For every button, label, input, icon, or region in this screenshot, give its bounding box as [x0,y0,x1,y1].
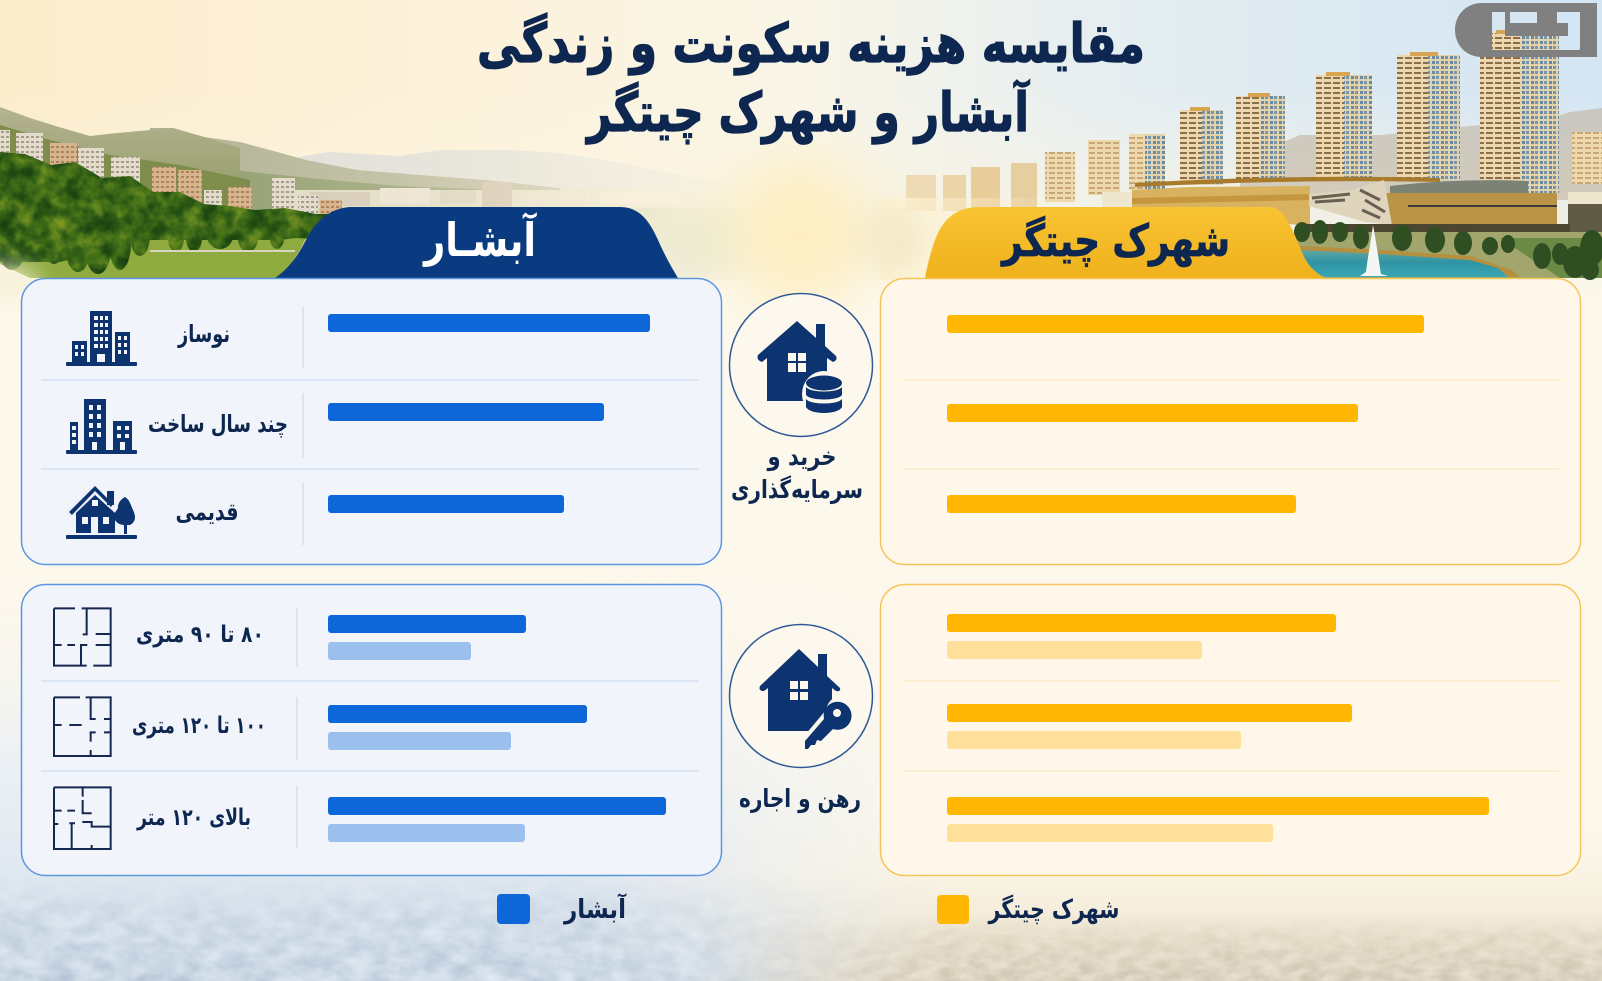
row: بالای ۱۲۰ متر [54,787,666,849]
slope apartments [0,130,342,222]
row: قدیمی [66,486,564,539]
bars: ۱۰۰ تا ۱۲۰ متری [947,704,1352,749]
icon: floor plan small [54,608,111,666]
bar: قدیمی [947,495,1296,513]
icon: mid-age buildings [66,399,137,454]
left scenery: mountains, forest, apartments, lawn [0,107,770,302]
legend: آبشار: آبشار [562,893,627,925]
panel: چیتگر purchase [880,278,1580,564]
tab: شهرک چیتگر: شهرک چیتگر [1000,215,1230,267]
bottom city haze: left [0,890,850,981]
center warm glow [730,160,870,310]
row: بالای ۱۲۰ متر: بالای ۱۲۰ متر [136,805,251,831]
bar: چند سال ساخت [947,404,1358,422]
tower M [1572,132,1602,184]
icon: new buildings [66,311,137,366]
icon: house with key [730,624,872,768]
icon: house with coins [730,294,872,436]
hazy trees either side of the centre [675,208,925,275]
label: خرید و سرمایه‌گذاری: سرمایه‌گذاری [731,475,863,505]
tower B [1397,52,1460,180]
far towers [906,163,1037,211]
tower D [1236,93,1285,181]
title: مقایسه هزینه سکونت و زندگی [477,12,1145,75]
panel: چیتگر rent [880,584,1580,876]
mall [1102,177,1602,233]
legend: شهرک چیتگر: شهرک چیتگر [987,894,1120,925]
row: ۸۰ تا ۹۰ متری [54,608,526,666]
row: نوساز: نوساز [177,320,230,348]
bottom city haze: right [747,924,1602,981]
legend: آبشار [497,893,627,925]
row: ۸۰ تا ۹۰ متری: ۸۰ تا ۹۰ متری [136,622,264,648]
row: ۱۰۰ تا ۱۲۰ متری [54,697,587,756]
title [477,12,1145,144]
legend: شهرک چیتگر [937,894,1120,925]
row: چند سال ساخت: چند سال ساخت [148,410,288,438]
row: ۱۰۰ تا ۱۲۰ متری: ۱۰۰ تا ۱۲۰ متری [132,713,266,739]
icon: old house and tree [66,486,137,539]
bars: بالای ۱۲۰ متر [947,797,1489,842]
bar: نوساز [947,315,1424,333]
logo [1455,3,1597,57]
icon: floor plan large [54,787,111,849]
forest canopy and foreground trees [0,152,345,274]
ground and trees by the lake [1294,220,1602,280]
panel: آبشار purchase [22,278,722,564]
tab: آبشار [275,207,678,278]
tower C [1316,72,1372,177]
lake [1296,248,1508,277]
title: آبشار و شهرک چیتگر [585,79,1030,144]
row: قدیمی: قدیمی [176,498,238,526]
tab: آبشار: آبشـار [422,212,537,267]
panel: آبشار rent [22,584,722,876]
right scenery: towers, mall, lake, trees [880,30,1602,280]
label: رهن و اجاره: رهن و اجاره [739,784,861,814]
lawn [0,225,312,278]
tower E [1180,107,1223,185]
row: نوساز [66,311,650,366]
bars: ۸۰ تا ۹۰ متری [947,614,1336,659]
fountain [1360,225,1388,276]
tower F [1129,134,1165,190]
row: چند سال ساخت [66,399,604,454]
tab: شهرک چیتگر [925,207,1326,278]
icon: floor plan medium [54,697,111,756]
tower A [1480,30,1559,193]
label: خرید و سرمایه‌گذاری: خرید و [766,442,836,472]
label: خرید و سرمایه‌گذاری [731,442,863,505]
